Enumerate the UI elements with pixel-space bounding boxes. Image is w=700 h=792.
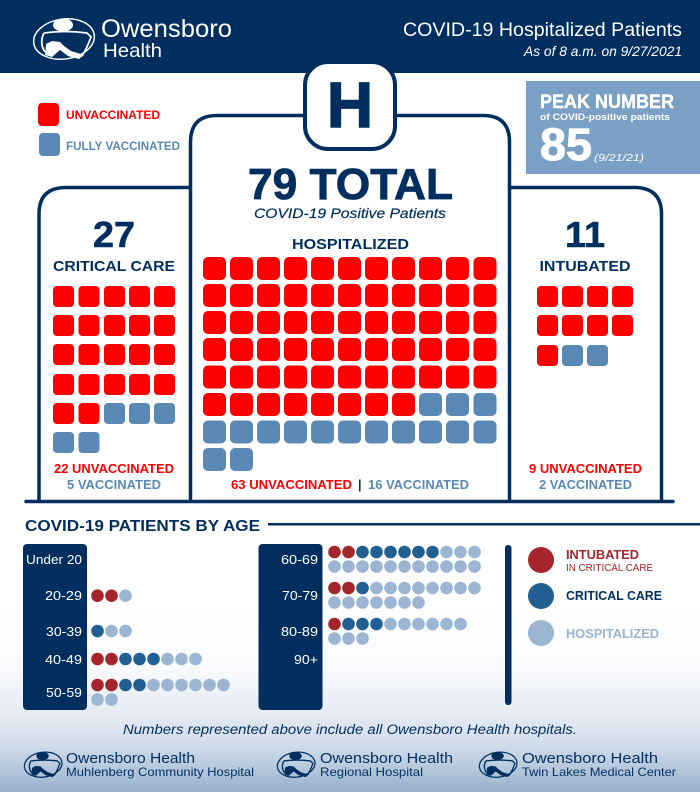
logo: Twin Lakes Medical Center: Owensboro Health: [522, 750, 658, 767]
age labels: 70-79: [282, 589, 318, 603]
age dots: [91, 589, 230, 706]
icon: hospital H badge: [305, 62, 395, 149]
hospitalized heading: HOSPITALIZED: [292, 236, 409, 253]
intubated counts: 2 VACCINATED: [539, 478, 632, 492]
logo: Twin Lakes Medical Center: Twin Lakes Medical Center: [522, 765, 676, 779]
intubated patient squares: [537, 286, 633, 366]
logo: Muhlenberg Community Hospital: Muhlenberg Community Hospital: [66, 765, 254, 779]
callout: peak number: [526, 81, 700, 174]
age labels: [281, 553, 318, 667]
header title: COVID-19 Hospitalized Patients: [403, 19, 682, 41]
age labels: 30-39: [46, 625, 82, 639]
age labels: [26, 553, 82, 700]
critical care counts: 22 UNVACCINATED: [54, 462, 174, 476]
legend: vaccination status: [38, 103, 180, 156]
age labels: 60-69: [281, 553, 318, 567]
age labels: 80-89: [281, 625, 318, 639]
panel: hospitalized: [203, 236, 496, 492]
hospitalized counts: |: [358, 478, 362, 492]
legend: age chart severity: IN CRITICAL CARE: [566, 563, 653, 574]
hospitalized counts: 16 VACCINATED: [368, 478, 469, 492]
age labels: 20-29: [45, 589, 82, 603]
logo: Regional Hospital: Owensboro Health: [320, 750, 453, 767]
legend: age chart severity: [528, 547, 662, 646]
callout: peak number: (9/21/21): [594, 152, 644, 164]
critical care counts: 5 VACCINATED: [67, 478, 161, 492]
legend: vaccination status: FULLY VACCINATED: [66, 141, 180, 153]
critical care counts: [54, 462, 174, 492]
age chart: right column: [258, 544, 481, 710]
hospitalized counts: 63 UNVACCINATED: [231, 478, 352, 492]
logo: Twin Lakes Medical Center: [478, 750, 676, 780]
hospitalized patient squares: [203, 257, 496, 471]
age labels: Under 20: [26, 553, 82, 567]
intubated heading: INTUBATED: [540, 258, 631, 275]
panel: intubated: [529, 214, 642, 492]
critical care number: 27: [93, 214, 135, 255]
intubated counts: 9 UNVACCINATED: [529, 462, 642, 476]
heading: 79 total: 79 TOTAL: [248, 160, 453, 209]
legend: age chart severity: HOSPITALIZED: [566, 627, 659, 641]
intubated counts: [529, 462, 642, 492]
age labels: 40-49: [45, 653, 82, 667]
logo: Muhlenberg Community Hospital: Owensboro Health: [66, 750, 195, 767]
age dots: [328, 546, 481, 645]
age labels: 90+: [294, 653, 318, 667]
footnote: Numbers represented above include all Owensboro Health hospitals.: [123, 722, 577, 737]
logo: Owensboro Health: [31, 15, 232, 63]
icon: hospital H badge: H: [327, 69, 373, 141]
panel: critical care: [53, 214, 175, 492]
heading: 79 total: COVID-19 Positive Patients: [254, 205, 446, 221]
callout: peak number: 85: [540, 119, 592, 170]
critical care patient squares: [53, 286, 175, 453]
heading: patients by age: COVID-19 PATIENTS BY AGE: [25, 518, 260, 535]
legend: vaccination status: UNVACCINATED: [66, 110, 160, 122]
logo: Owensboro Health: Owensboro: [101, 15, 232, 43]
header date: As of 8 a.m. on 9/27/2021: [523, 44, 682, 59]
callout: peak number: of COVID-positive patients: [540, 112, 670, 122]
intubated number: 11: [565, 214, 605, 255]
logo: Muhlenberg Community Hospital: [23, 750, 254, 780]
age chart: left column: [23, 544, 230, 710]
header band: [0, 0, 700, 73]
legend: age chart severity: INTUBATED: [566, 548, 639, 562]
panel outlines: [26, 116, 673, 502]
callout: peak number: PEAK NUMBER: [540, 91, 674, 113]
hospitalized counts: [231, 478, 469, 492]
logo: Regional Hospital: [276, 750, 453, 780]
logo: Owensboro Health: Health: [103, 40, 162, 62]
legend: age chart severity: CRITICAL CARE: [566, 589, 662, 603]
logo: Regional Hospital: Regional Hospital: [320, 765, 423, 779]
age labels: 50-59: [46, 686, 82, 700]
critical care heading: CRITICAL CARE: [53, 258, 175, 275]
